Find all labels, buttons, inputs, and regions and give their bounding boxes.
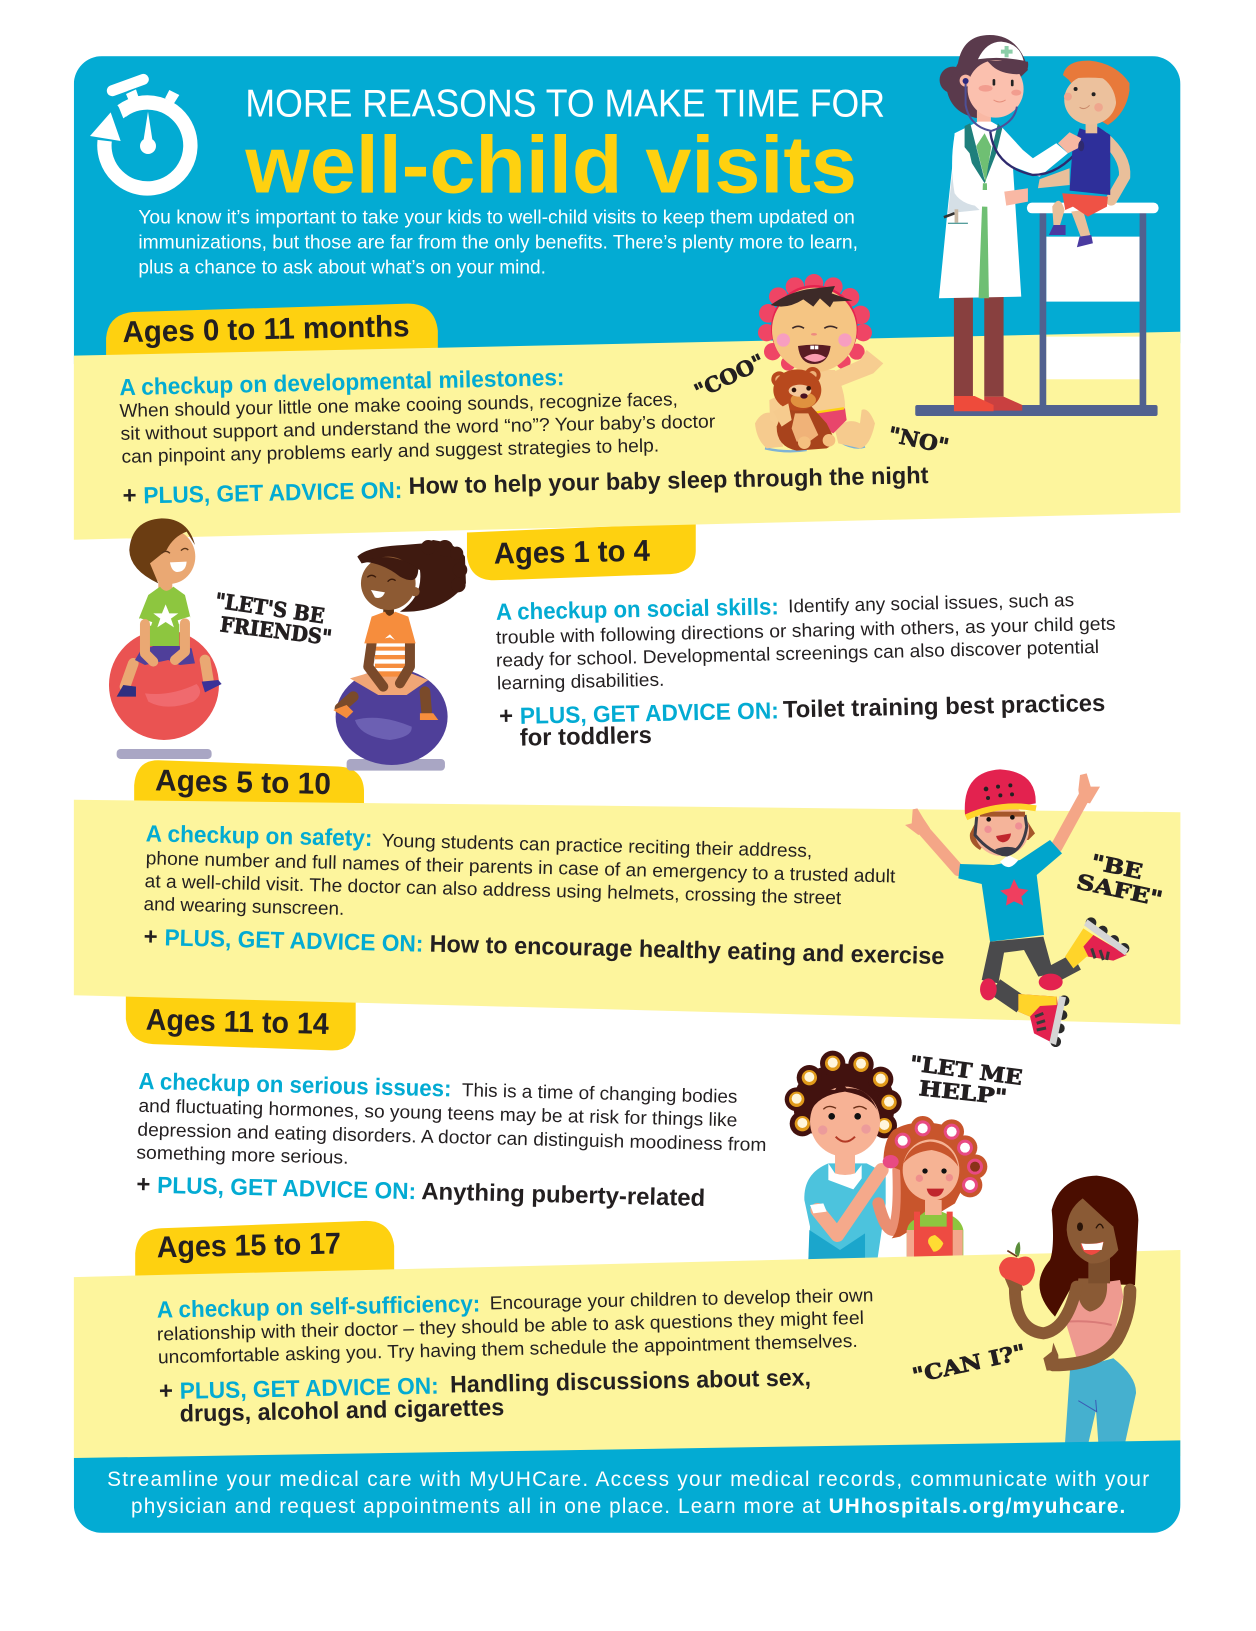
body copy: [119, 388, 715, 467]
advice lines: [159, 1364, 811, 1428]
advice line: [143, 923, 945, 970]
section: ages 11 to 14: [136, 1004, 767, 1212]
body copy: ready for school. Developmental screenings can also discover potential: [496, 636, 1099, 671]
intro paragraph: [138, 208, 858, 279]
advice lines: PLUS, GET ADVICE ON:: [180, 1373, 439, 1404]
quote: LET'S BE FRIENDS: [214, 588, 333, 650]
heading: Ages 5 to 10: [155, 764, 331, 801]
advice line: [122, 462, 929, 509]
section band: ages 15 to 17: [74, 1250, 1180, 1466]
illustration: mother and daughter with curlers: [785, 1051, 987, 1260]
footer banner: [74, 1440, 1180, 1533]
body copy: learning disabilities.: [497, 669, 665, 694]
icon: stopwatch: [90, 79, 190, 188]
advice line: +: [143, 923, 158, 951]
background panel: [74, 56, 1180, 364]
advice lines: Toilet training best practices: [783, 690, 1106, 724]
title kicker: MORE REASONS TO MAKE TIME FOR: [245, 82, 885, 125]
body copy: [143, 830, 896, 919]
illustration: two kids on bouncing balls: [109, 518, 467, 771]
quote: BE SAFE: [1074, 849, 1165, 911]
advice lines: [499, 690, 1106, 752]
footer text: [107, 1468, 1149, 1518]
checkup subhead: A checkup on social skills:: [496, 593, 779, 625]
advice line: PLUS, GET ADVICE ON:: [157, 1172, 416, 1204]
advice line: How to help your baby sleep through the night: [408, 462, 929, 500]
age tab: Ages 0 to 11 months: [106, 304, 438, 359]
checkup subhead: A checkup on developmental milestones:: [119, 364, 565, 400]
age tab: Ages 11 to 14: [126, 993, 356, 1050]
quote: LET ME HELP: HELP": [918, 1075, 1008, 1109]
body copy: Young students can practice reciting their address,: [382, 830, 813, 861]
advice lines: drugs, alcohol and cigarettes: [180, 1394, 504, 1428]
checkup subhead: A checkup on safety:: [146, 820, 373, 851]
body copy: [157, 1284, 874, 1367]
section band: ages 0 to 11 months: [74, 332, 1180, 540]
section: ages 15 to 17: [157, 1227, 874, 1428]
advice lines: +: [499, 703, 513, 730]
age tab: Ages 15 to 17: [135, 1221, 394, 1281]
quote: BE SAFE: SAFE": [1074, 869, 1165, 911]
section: ages 0 to 11 months: [119, 310, 929, 509]
body copy: something more serious.: [136, 1142, 349, 1168]
advice line: +: [122, 482, 137, 509]
body copy: at a well-child visit. The doctor can also address using helmets, crossing the street: [144, 870, 842, 908]
quote: LET ME HELP: [908, 1050, 1024, 1109]
quote: COO: "COO": [690, 349, 768, 404]
body copy: and fluctuating hormones, so young teens may be at risk for things like: [138, 1095, 738, 1130]
heading: Ages 1 to 4: [493, 535, 650, 571]
body copy: and wearing sunscreen.: [143, 893, 345, 919]
illustration: baby with teddy bear: [755, 274, 883, 451]
advice line: How to encourage healthy eating and exercise: [429, 931, 945, 970]
heading: Ages 11 to 14: [145, 1004, 329, 1041]
quote: LET'S BE FRIENDS: "LET'S BE: [214, 588, 326, 628]
advice lines: Handling discussions about sex,: [450, 1364, 811, 1399]
advice line: [136, 1171, 706, 1212]
advice line: PLUS, GET ADVICE ON:: [143, 477, 403, 508]
footer text: physician and request appointments all in one place. Learn more at UHhospitals.org/myuhcare.: [131, 1495, 1125, 1518]
heading: Ages 0 to 11 months: [122, 310, 410, 349]
advice lines: for toddlers: [520, 722, 652, 752]
checkup subhead: A checkup on serious issues:: [138, 1068, 452, 1102]
advice line: Anything puberty-related: [421, 1178, 706, 1212]
intro paragraph: immunizations, but those are far from the only benefits. There’s plenty more to learn,: [138, 233, 858, 254]
main title: well-child visits: [244, 120, 857, 210]
quote: BE SAFE: "BE: [1089, 849, 1145, 884]
quote: NO: "NO": [886, 421, 951, 459]
body copy: This is a time of changing bodies: [462, 1079, 738, 1107]
section: ages 1 to 4: [493, 535, 1116, 752]
body copy: sit without support and understand the word “no”? Your baby’s doctor: [120, 410, 715, 444]
quote: LET'S BE FRIENDS: FRIENDS": [219, 611, 333, 650]
section: ages 5 to 10: [143, 764, 945, 970]
advice line: PLUS, GET ADVICE ON:: [164, 924, 424, 957]
footer text: Streamline your medical care with MyUHCare. Access your medical records, communicate with your: [107, 1468, 1149, 1491]
quote: LET ME HELP: "LET ME: [908, 1050, 1024, 1090]
age tab: Ages 1 to 4: [467, 523, 696, 580]
body copy: Encourage your children to develop their own: [489, 1284, 874, 1313]
quote: CAN I?: "CAN I?": [910, 1339, 1028, 1388]
header blue area: [74, 56, 1180, 364]
illustration: doctor and boy on exam table: [915, 35, 1159, 416]
body copy: When should your little one make cooing sounds, recognize faces,: [119, 388, 678, 421]
body copy: trouble with following directions or sharing with others, as your child gets: [496, 613, 1116, 648]
advice line: +: [136, 1171, 151, 1198]
checkup subhead: A checkup on self-sufficiency:: [157, 1290, 481, 1323]
body copy: [136, 1079, 767, 1168]
body copy: can pinpoint any problems early and suggest strategies to help.: [121, 435, 659, 467]
section band: ages 5 to 10: [74, 800, 1180, 1024]
advice lines: +: [159, 1377, 173, 1405]
body copy: depression and eating disorders. A doctor can distinguish moodiness from: [137, 1119, 767, 1155]
illustration: teen with apple: [999, 1176, 1138, 1443]
body copy: [496, 589, 1116, 694]
body copy: phone number and full names of their parents in case of an emergency to a trusted adult: [146, 847, 896, 887]
intro paragraph: plus a chance to ask about what’s on your mind.: [138, 258, 546, 279]
title: [244, 82, 885, 210]
illustration: child on roller skates: [905, 769, 1129, 1047]
body copy: relationship with their doctor – they should be able to ask questions they might feel: [157, 1307, 864, 1345]
body copy: uncomfortable asking you. Try having them schedule the appointment themselves.: [158, 1330, 858, 1367]
heading: Ages 15 to 17: [157, 1227, 341, 1264]
advice lines: PLUS, GET ADVICE ON:: [520, 697, 779, 729]
body copy: Identify any social issues, such as: [788, 589, 1074, 617]
age tab: Ages 5 to 10: [134, 760, 364, 806]
intro paragraph: You know it’s important to take your kids to well-child visits to keep them updated on: [138, 208, 855, 229]
